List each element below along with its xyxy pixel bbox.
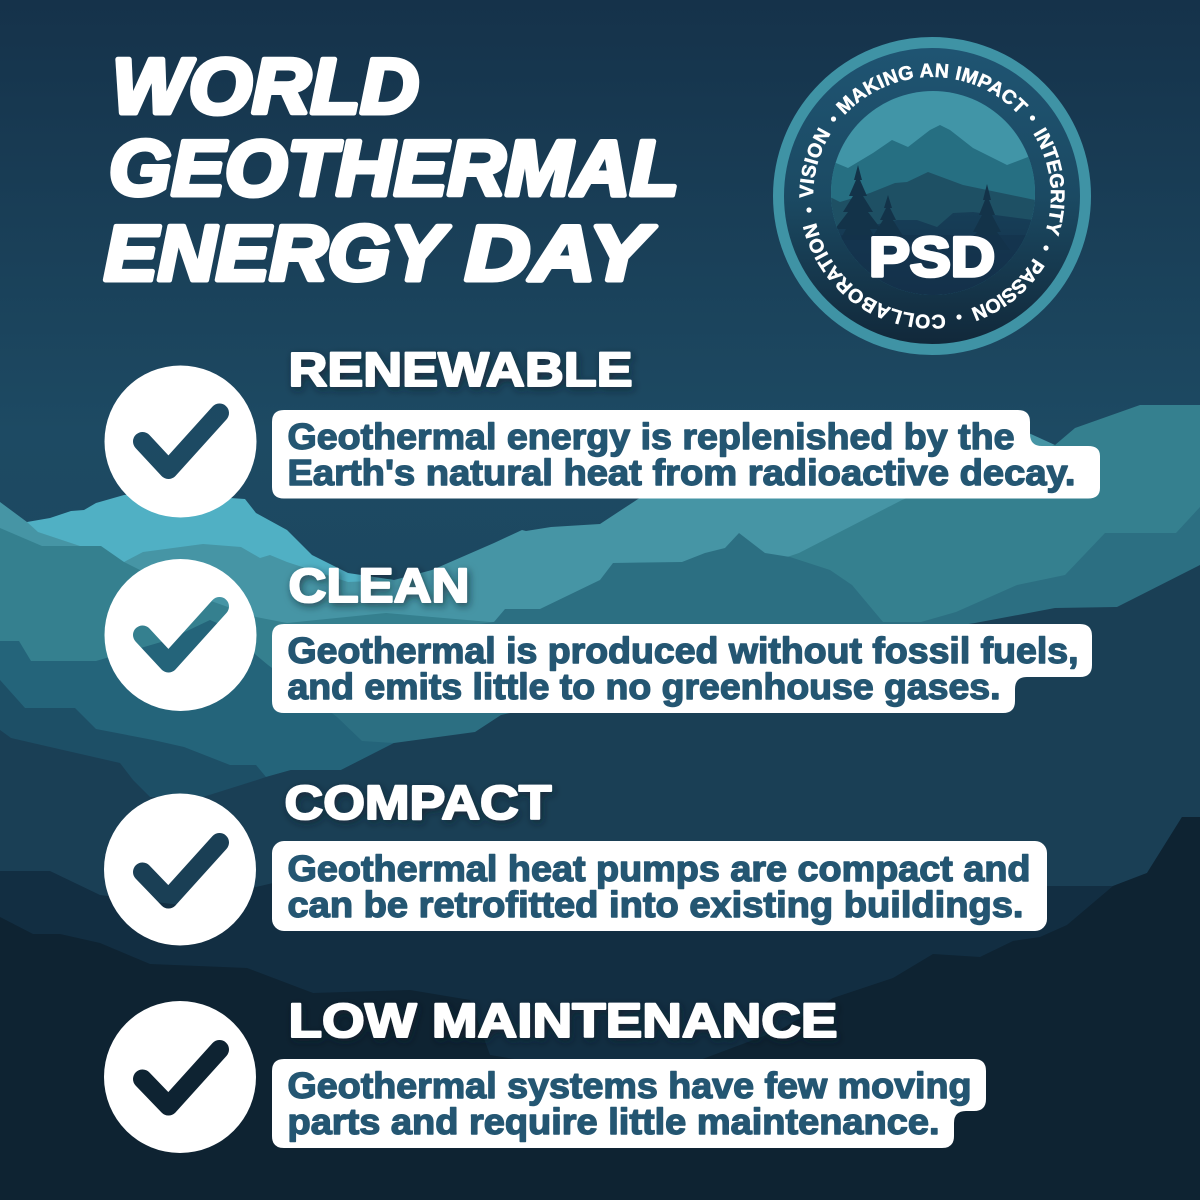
description 4: Geothermal systems have few moving [288, 1065, 972, 1106]
description 2 [288, 630, 1078, 707]
description 4: parts and require little maintenance. [288, 1101, 940, 1142]
icon: check circle 4 [104, 1001, 256, 1153]
description 1 [288, 416, 1076, 493]
description 3: can be retrofitted into existing buildings. [288, 884, 1024, 925]
icon: check circle 1 [104, 366, 256, 518]
item 2: clean [104, 559, 1092, 713]
ring separator dots [806, 115, 1049, 320]
description 3: Geothermal heat pumps are compact and [288, 848, 1030, 889]
description 1: Geothermal energy is replenished by the [288, 416, 1014, 457]
badge: PSD logo [773, 37, 1091, 355]
badge: PSD logo: PASSION [971, 258, 1045, 322]
badge: PSD logo: COLLABORATION [802, 223, 946, 329]
title: GEOTHERMAL [109, 124, 679, 212]
description 3 [288, 848, 1030, 925]
text box 4 [272, 1059, 986, 1148]
text box 1 [272, 410, 1100, 498]
badge mountain scene [825, 90, 1040, 300]
item 1: renewable [104, 343, 1100, 518]
heading: clean: CLEAN [288, 559, 470, 613]
heading: low maintenance: LOW MAINTENANCE [288, 994, 838, 1048]
mountain range background [0, 405, 1200, 1200]
heading: renewable: RENEWABLE [288, 343, 632, 397]
title [104, 42, 679, 297]
badge outer ring [778, 42, 1086, 350]
icon: check circle 2 [104, 559, 256, 711]
ring values text [813, 77, 1051, 315]
text box 2 [272, 624, 1092, 713]
item 3: compact [104, 776, 1047, 946]
badge: PSD logo: MAKING AN IMPACT [836, 63, 1029, 115]
description 1: Earth's natural heat from radioactive decay. [288, 452, 1076, 493]
title: DAY [465, 209, 656, 297]
icon: check circle 3 [104, 794, 256, 946]
description 4 [288, 1065, 972, 1142]
item 4: low maintenance [104, 994, 986, 1153]
heading: compact: COMPACT [284, 776, 552, 830]
title: ENERGY [104, 209, 450, 297]
description 2: Geothermal is produced without fossil fuels, [288, 630, 1078, 671]
badge: PSD logo: INTEGRITY [1034, 127, 1065, 237]
title: WORLD [112, 42, 419, 130]
text box 3 [272, 841, 1047, 931]
PSD wordmark: PSD [869, 225, 995, 288]
description 2: and emits little to no greenhouse gases. [288, 666, 1000, 707]
badge: PSD logo: VISION [799, 127, 830, 198]
